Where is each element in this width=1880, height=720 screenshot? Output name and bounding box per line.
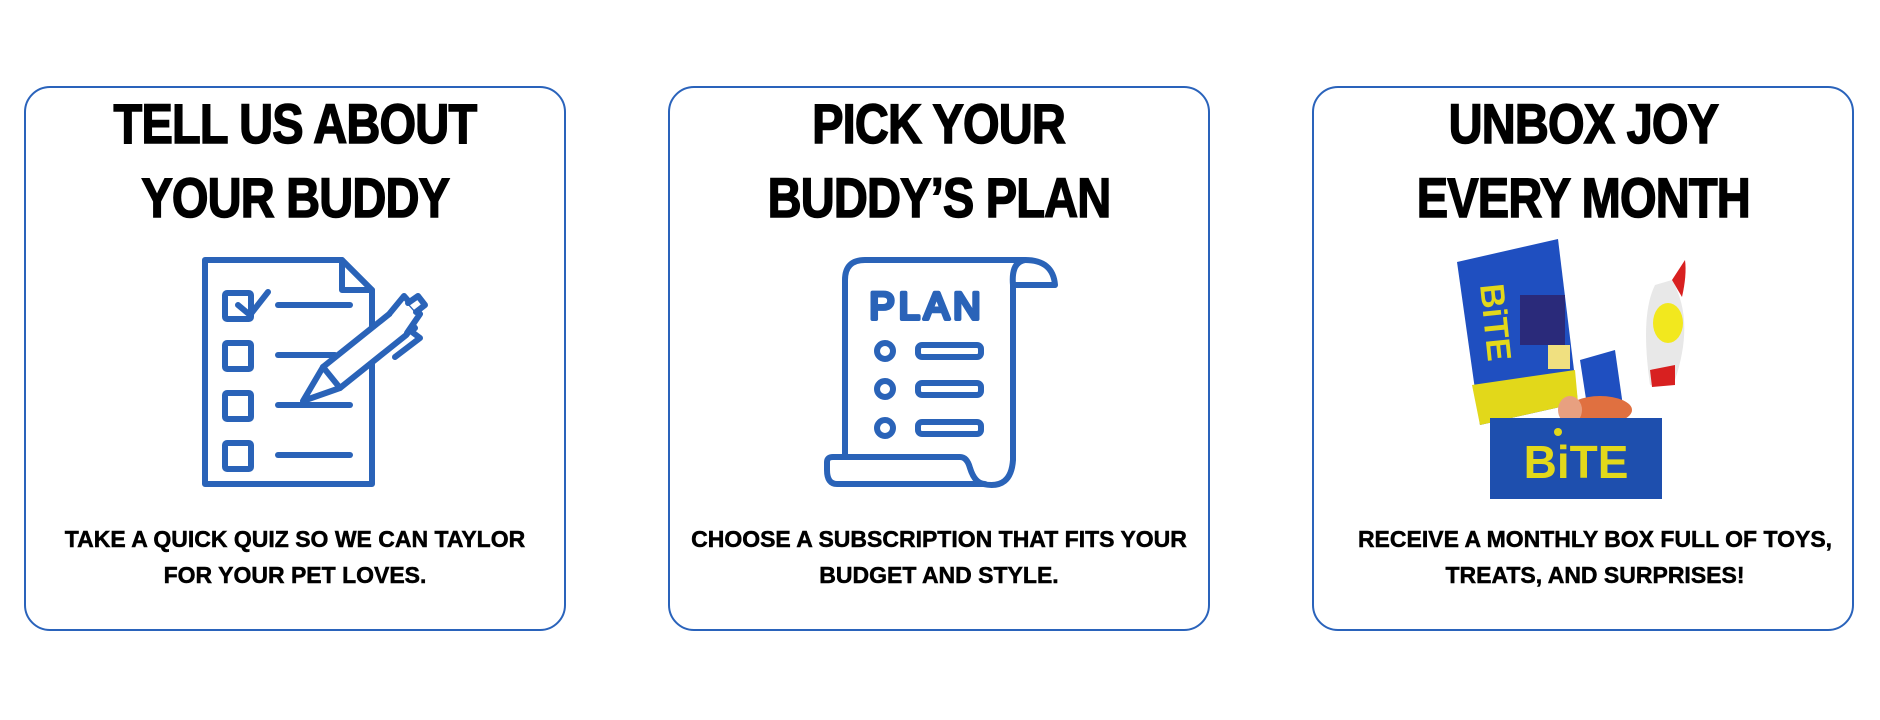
title: pick your buddy's plan: PICK YOUR xyxy=(813,92,1065,155)
title: pick your buddy's plan: BUDDY’S PLAN xyxy=(768,166,1110,229)
title: unbox joy every month: UNBOX JOY xyxy=(1448,92,1718,155)
description: monthly box: RECEIVE A MONTHLY BOX FULL OF TOYS, xyxy=(1358,526,1832,552)
treat bag xyxy=(1457,239,1578,425)
description: subscription: BUDGET AND STYLE. xyxy=(819,562,1059,588)
box: BiTE xyxy=(1524,436,1628,488)
description: subscription: CHOOSE A SUBSCRIPTION THAT FITS YOUR xyxy=(691,526,1187,552)
icon: checklist with pen xyxy=(202,257,428,487)
panel: unbox joy every month xyxy=(1312,86,1854,631)
small box xyxy=(1580,350,1625,425)
icon: plan scroll xyxy=(824,257,1058,488)
description: quiz: FOR YOUR PET LOVES. xyxy=(164,562,426,588)
box xyxy=(1490,418,1662,499)
title: tell us about your buddy: YOUR BUDDY xyxy=(141,166,449,229)
treat bag: BiTE xyxy=(1472,282,1518,363)
description: monthly box xyxy=(1358,526,1832,588)
rocket toy xyxy=(1646,260,1686,387)
panel: pick your buddy's plan xyxy=(668,86,1210,631)
fish toy xyxy=(1568,396,1632,424)
title: pick your buddy's plan xyxy=(768,92,1110,229)
description: quiz: TAKE A QUICK QUIZ SO WE CAN TAYLOR xyxy=(65,526,525,552)
panel: tell us about your buddy xyxy=(24,86,566,631)
description: subscription xyxy=(691,526,1187,588)
title: tell us about your buddy xyxy=(113,92,478,229)
illustration: BITE box with treats and toys xyxy=(1457,239,1686,499)
description: monthly box: TREATS, AND SURPRISES! xyxy=(1445,562,1745,588)
title: unbox joy every month: EVERY MONTH xyxy=(1416,166,1750,229)
title: tell us about your buddy: TELL US ABOUT xyxy=(114,92,476,155)
description: quiz xyxy=(64,526,526,588)
title: unbox joy every month xyxy=(1416,92,1750,229)
icon: plan scroll: PLAN xyxy=(869,286,985,328)
